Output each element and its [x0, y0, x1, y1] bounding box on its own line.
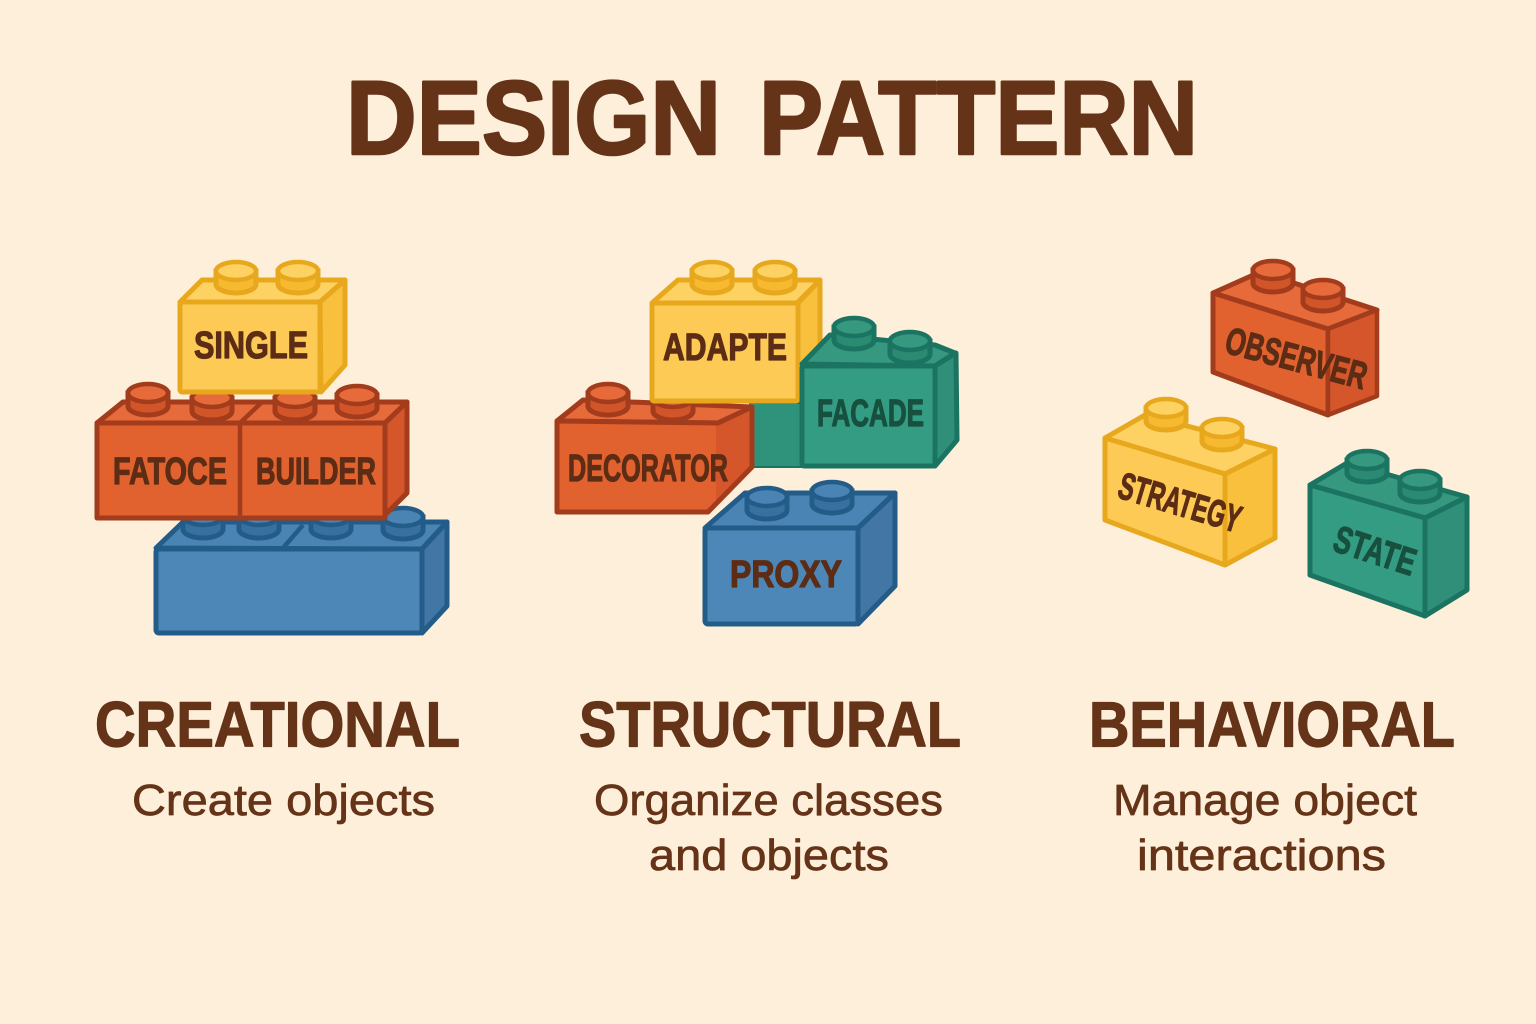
- brick: OBSERVER: OBSERVER: [1221, 320, 1372, 398]
- brick: FATOCE and BUILDER: [97, 384, 407, 518]
- title: PATTERN: [759, 60, 1198, 177]
- brick: STRATEGY: [1105, 399, 1275, 565]
- brick: FACADE: FACADE: [817, 393, 924, 435]
- title: [346, 60, 1198, 177]
- heading: creational: CREATIONAL: [95, 688, 460, 760]
- brick: STRATEGY: STRATEGY: [1113, 465, 1246, 541]
- brick: DECORATOR: [557, 384, 752, 512]
- brick: FATOCE and BUILDER: BUILDER: [256, 451, 376, 493]
- brick: ADAPTE: [652, 262, 820, 401]
- text: behavioral description: Manage object: [1113, 776, 1417, 825]
- brick: PROXY: PROXY: [730, 554, 842, 596]
- text: structural description: Organize classes: [594, 776, 943, 825]
- brick: STATE: [1310, 451, 1467, 616]
- text: creational description: Create objects: [132, 776, 435, 825]
- text: structural description: and objects: [649, 831, 889, 880]
- text: structural description: [594, 776, 943, 880]
- brick: FATOCE and BUILDER: FATOCE: [113, 451, 227, 493]
- panel: behavioral bricks: [1105, 261, 1467, 616]
- text: behavioral description: [1113, 776, 1417, 880]
- heading: structural: STRUCTURAL: [579, 688, 961, 760]
- brick: ADAPTE: ADAPTE: [663, 327, 787, 369]
- brick: SINGLE: SINGLE: [194, 325, 308, 367]
- brick: SINGLE: [180, 262, 345, 392]
- brick: green extension behind facade: [750, 403, 804, 467]
- brick: DECORATOR: DECORATOR: [568, 448, 728, 490]
- brick: STATE: STATE: [1328, 519, 1421, 585]
- brick: FACADE: [802, 318, 957, 466]
- text: behavioral description: interactions: [1137, 831, 1386, 880]
- brick: PROXY: [705, 482, 895, 624]
- title: DESIGN: [346, 60, 721, 177]
- brick: OBSERVER: [1213, 261, 1377, 415]
- panel: structural bricks: [557, 262, 957, 624]
- heading: behavioral: BEHAVIORAL: [1089, 688, 1455, 760]
- panel: creational bricks: [97, 262, 447, 633]
- brick: blue base: [156, 507, 447, 633]
